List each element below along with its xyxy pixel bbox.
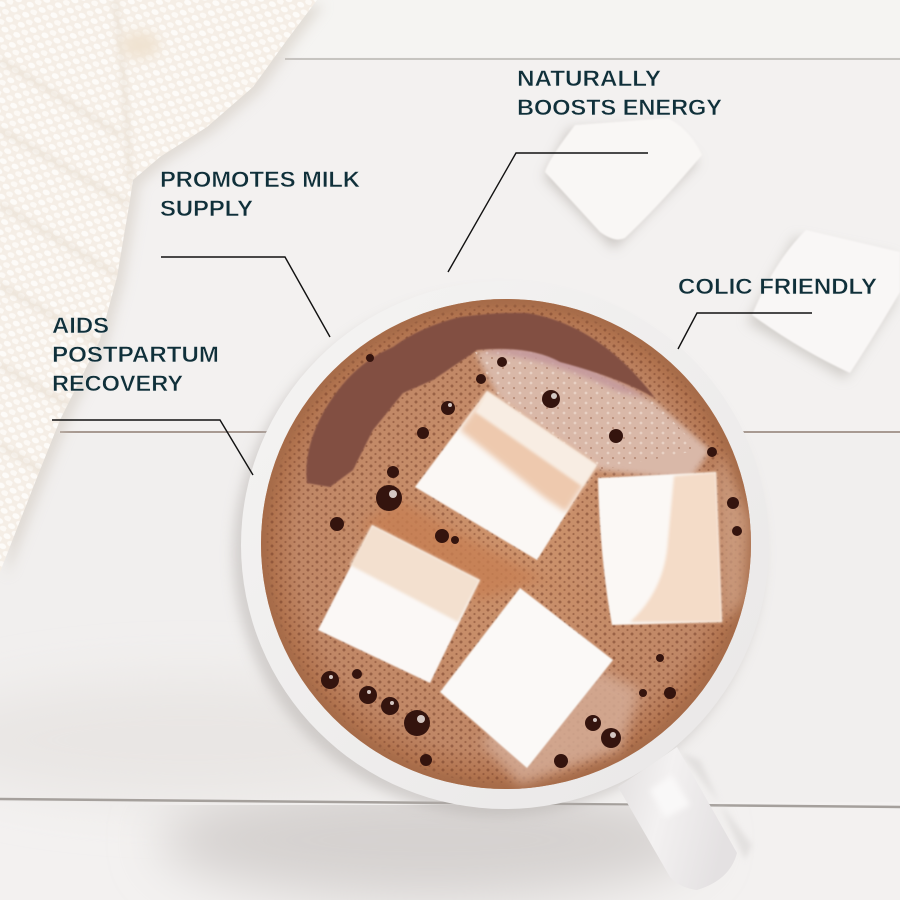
marshmallow in cocoa: top xyxy=(415,391,597,560)
dark cocoa pool xyxy=(306,313,655,487)
callout: naturally boosts energy: NATURALLY xyxy=(517,66,661,91)
callout: promotes milk supply: SUPPLY xyxy=(160,196,253,221)
callout: promotes milk supply xyxy=(160,167,361,337)
callout: aids postpartum recovery xyxy=(52,313,253,475)
marshmallow in cocoa: right xyxy=(598,472,722,625)
foam texture xyxy=(261,299,751,789)
pale sheen under the pool xyxy=(475,348,710,480)
callout: naturally boosts energy xyxy=(448,66,722,272)
callout: aids postpartum recovery: POSTPARTUM xyxy=(52,342,219,367)
knit blanket xyxy=(0,0,321,566)
marshmallow on table: upper xyxy=(544,118,702,249)
marshmallow in cocoa: left xyxy=(318,525,480,683)
marshmallow on table: right xyxy=(747,230,900,379)
callout: aids postpartum recovery: AIDS xyxy=(52,313,109,338)
callout: colic friendly: COLIC FRIENDLY xyxy=(678,274,877,299)
mug with cocoa xyxy=(233,281,769,890)
pale foam at lower centre and right xyxy=(360,450,750,785)
marshmallow in cocoa: bottom xyxy=(440,588,613,768)
foam bubbles xyxy=(321,354,742,768)
callout: promotes milk supply: PROMOTES MILK xyxy=(160,167,361,192)
mug rim xyxy=(241,281,769,809)
cocoa foam xyxy=(261,299,751,789)
callout: naturally boosts energy: BOOSTS ENERGY xyxy=(517,95,722,120)
mug handle xyxy=(618,747,752,890)
callout: colic friendly xyxy=(678,274,877,349)
callout: aids postpartum recovery: RECOVERY xyxy=(52,371,183,396)
bubble highlights xyxy=(329,393,616,738)
